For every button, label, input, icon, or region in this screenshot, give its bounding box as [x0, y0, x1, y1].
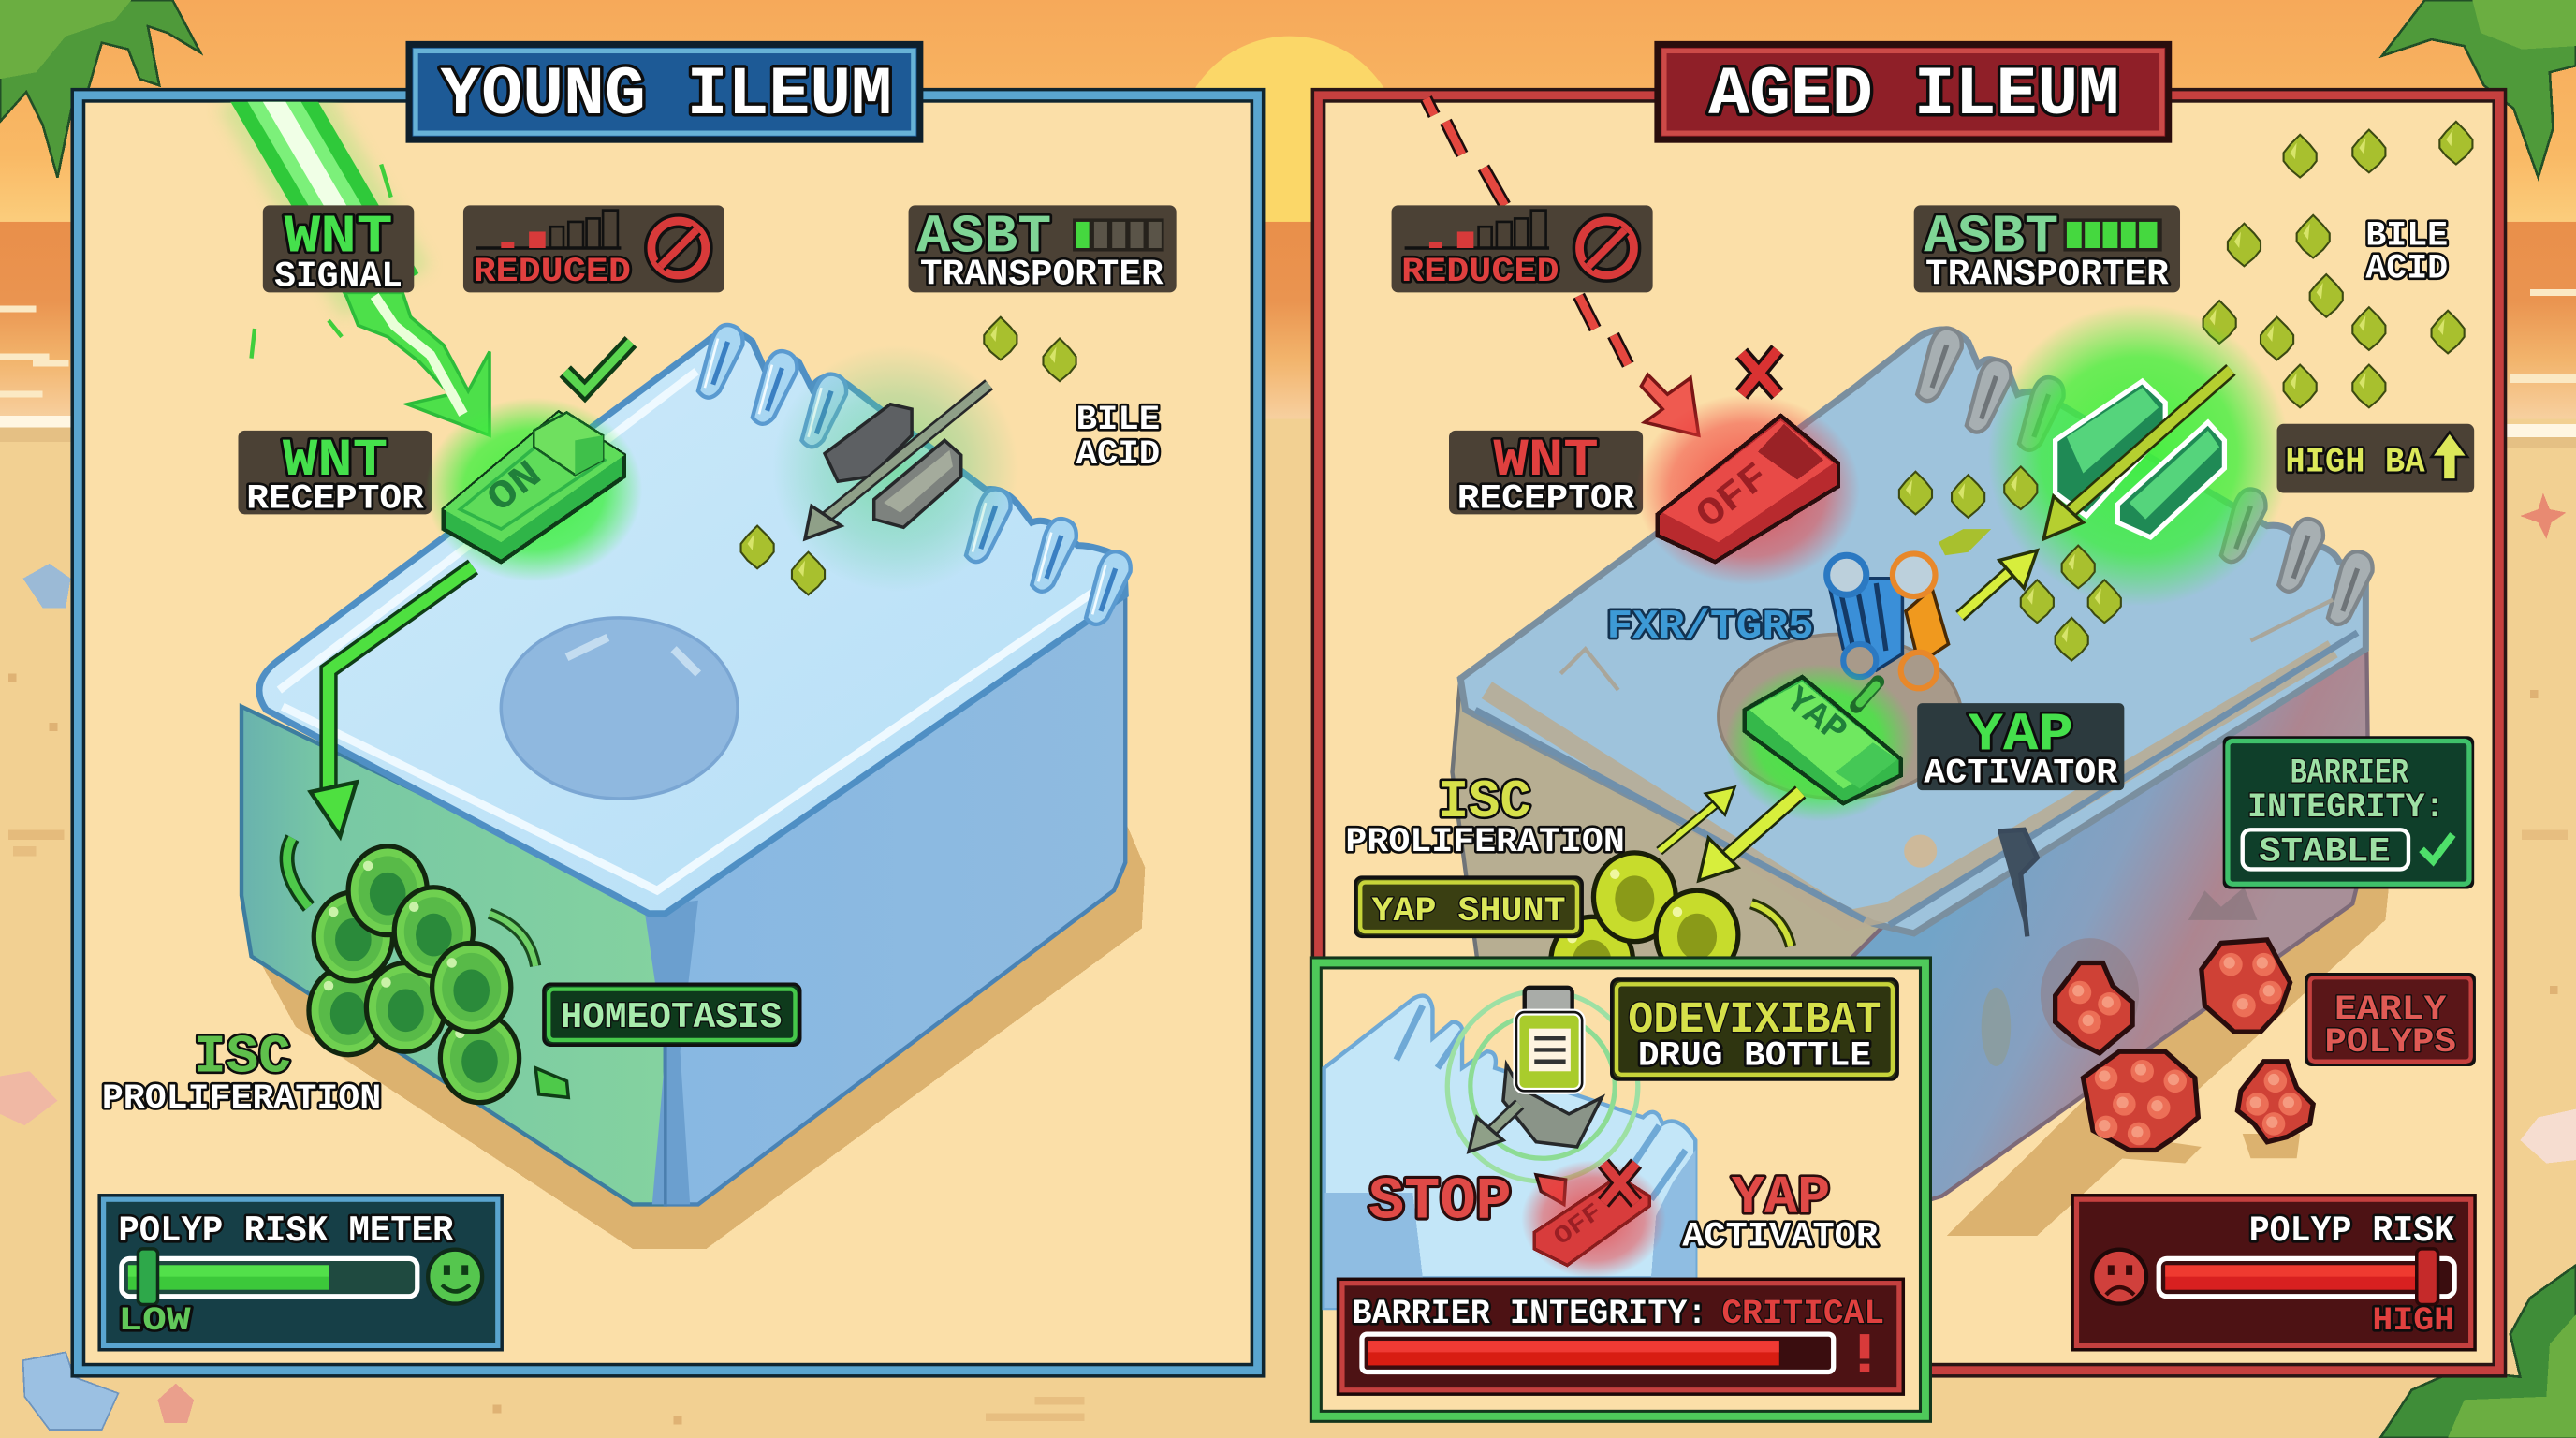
label: yap activator inset	[1682, 1168, 1879, 1256]
label: wnt signal	[263, 205, 414, 297]
icon: drug bottle	[1516, 988, 1582, 1091]
young intestinal cell	[242, 325, 1145, 1249]
nucleus aged	[1719, 634, 1962, 799]
title: aged ileum: AGED ILEUM	[1708, 57, 2119, 135]
label: isc proliferation aged	[1345, 772, 1625, 862]
label: asbt transporter aged: TRANSPORTER	[1925, 255, 2170, 296]
label: asbt transporter young: TRANSPORTER	[920, 255, 1164, 296]
label: reduced signal	[463, 205, 724, 292]
label: wnt signal: SIGNAL	[274, 256, 402, 297]
switch: yap	[1725, 664, 1915, 822]
label: yap activator inset: ACTIVATOR	[1682, 1217, 1879, 1256]
title: young ileum: YOUNG ILEUM	[440, 57, 892, 135]
label: stop: STOP	[1368, 1167, 1512, 1235]
label: barrier integrity stable	[2224, 738, 2472, 888]
label: odevixibat drug bottle	[1612, 979, 1897, 1079]
label: asbt transporter aged: ASBT	[1924, 208, 2058, 269]
label: barrier integrity stable: BARRIER	[2291, 754, 2409, 793]
label: wnt receptor young	[238, 431, 432, 519]
check mark young	[565, 342, 631, 391]
label: isc proliferation aged: PROLIFERATION	[1345, 823, 1625, 862]
switch: small off	[1521, 1160, 1666, 1278]
label: high bile acid: HIGH BA	[2285, 444, 2425, 483]
stem cell cluster young	[287, 838, 568, 1103]
barrier integrity critical: BARRIER INTEGRITY:	[1352, 1295, 1707, 1334]
polyps	[2056, 940, 2313, 1164]
label: wnt receptor aged: RECEPTOR	[1457, 479, 1635, 519]
label: isc proliferation young	[102, 1027, 381, 1119]
polyp risk meter low: POLYP RISK METER	[118, 1211, 454, 1252]
label: bile acid aged	[2365, 216, 2448, 289]
polyp 4	[2237, 1062, 2313, 1142]
polyp risk meter low: LOW	[118, 1302, 192, 1340]
label: wnt receptor aged	[1449, 431, 1643, 519]
inset cell	[1325, 996, 1695, 1308]
wnt signal dashed arrow	[1426, 98, 1699, 435]
label: asbt transporter aged	[1914, 205, 2180, 296]
label: yap activator aged: ACTIVATOR	[1924, 754, 2118, 793]
label: bile acid aged: ACID	[2365, 250, 2448, 289]
label: yap activator aged: YAP	[1969, 705, 2073, 766]
icon: sad face	[2092, 1250, 2146, 1304]
bile acid aged	[2203, 122, 2472, 407]
polyp 2	[2202, 940, 2291, 1032]
switch: wnt off: OFF	[1689, 455, 1778, 538]
label: asbt transporter young	[909, 205, 1177, 296]
palm: top left	[0, 0, 200, 178]
label: early polyps: POLYPS	[2324, 1023, 2456, 1063]
inset: treatment panel	[1316, 962, 1925, 1416]
panel frame young	[78, 95, 1258, 1371]
arrow: bile acid to receptor	[1960, 550, 2037, 616]
label: barrier integrity stable: STABLE	[2259, 833, 2391, 873]
panel frame aged	[1318, 95, 2499, 1371]
label: isc proliferation young: PROLIFERATION	[102, 1079, 381, 1119]
label: wnt receptor young: WNT	[283, 431, 388, 491]
label: isc proliferation young: ISC	[194, 1027, 291, 1088]
shells and starfish	[0, 493, 2576, 1430]
title: aged ileum	[1658, 44, 2169, 139]
panel: aged ileum	[1318, 44, 2499, 1371]
polyp risk meter high: POLYP RISK	[2249, 1211, 2455, 1252]
label: fxr tgr5: FXR/TGR5	[1606, 604, 1814, 651]
label: asbt transporter young: ASBT	[916, 208, 1051, 269]
label: yap activator inset: YAP	[1732, 1168, 1830, 1229]
label: homeostasis	[544, 984, 800, 1045]
polyp 3	[2083, 1051, 2198, 1151]
label: odevixibat drug bottle: ODEVIXIBAT	[1628, 996, 1881, 1046]
label: reduced signal aged: REDUCED	[1401, 253, 1559, 292]
label: bile acid aged: BILE	[2365, 216, 2448, 256]
icon: red x	[1741, 350, 1778, 394]
switch: small off: OFF	[1548, 1198, 1607, 1252]
polyp risk meter low	[100, 1196, 501, 1349]
stem cell cluster aged	[1551, 853, 1791, 1005]
barrier integrity critical	[1339, 1280, 1902, 1393]
wnt signal beam arrow	[252, 82, 490, 435]
icon: happy face	[428, 1250, 482, 1304]
switch: wnt off	[1636, 394, 1860, 585]
icon: exclamation	[1860, 1334, 1869, 1372]
asbt transporter gray	[772, 345, 1018, 592]
signal path arrow to stem cells	[311, 566, 473, 836]
icon: small red arrow	[1536, 1175, 1566, 1204]
barrier integrity critical: CRITICAL	[1721, 1295, 1884, 1334]
label: bile acid young: BILE	[1076, 401, 1160, 440]
label: wnt receptor young: RECEPTOR	[246, 479, 425, 519]
label: early polyps	[2306, 975, 2474, 1064]
label: reduced signal aged	[1392, 205, 1653, 292]
switch: yap: YAP	[1778, 680, 1854, 753]
inset frame	[1316, 962, 1925, 1416]
panel: young ileum	[78, 44, 1258, 1371]
palm: bottom right	[2380, 1265, 2576, 1438]
polyp shadows	[2111, 1134, 2300, 1164]
label: barrier integrity stable: INTEGRITY:	[2247, 788, 2445, 828]
arrows from yap	[1660, 787, 1801, 881]
fxr tgr5 receptor coil	[1827, 553, 1949, 688]
treatment rings and transporter	[1447, 990, 1638, 1181]
label: odevixibat drug bottle: DRUG BOTTLE	[1638, 1036, 1871, 1076]
palm: top right	[2382, 0, 2576, 178]
label: homeostasis: HOMEOTASIS	[560, 997, 782, 1038]
label: yap activator aged	[1917, 703, 2124, 793]
polyp risk meter high	[2073, 1196, 2474, 1349]
label: wnt receptor aged: WNT	[1493, 431, 1599, 491]
switch: wnt on: ON	[479, 452, 551, 522]
label: isc proliferation aged: ISC	[1438, 772, 1531, 833]
label: wnt signal: WNT	[285, 208, 392, 269]
label: high bile acid	[2277, 424, 2474, 493]
label: bile acid young: ACID	[1076, 435, 1160, 475]
high asbt transporter	[1988, 304, 2291, 607]
label: early polyps: EARLY	[2334, 990, 2447, 1030]
label: bile acid young	[1076, 401, 1160, 475]
label: yap shunt: YAP SHUNT	[1372, 892, 1566, 932]
switch: wnt on	[426, 398, 642, 581]
nucleus	[501, 618, 738, 799]
polyp risk meter high: HIGH	[2372, 1302, 2454, 1340]
bile acid inside cell	[1899, 466, 2121, 661]
label: reduced signal: REDUCED	[473, 253, 631, 292]
bile acid young	[741, 317, 1076, 594]
aged intestinal cell	[1453, 329, 2392, 1236]
label: yap shunt	[1355, 877, 1582, 936]
polyp 1	[2056, 962, 2132, 1053]
